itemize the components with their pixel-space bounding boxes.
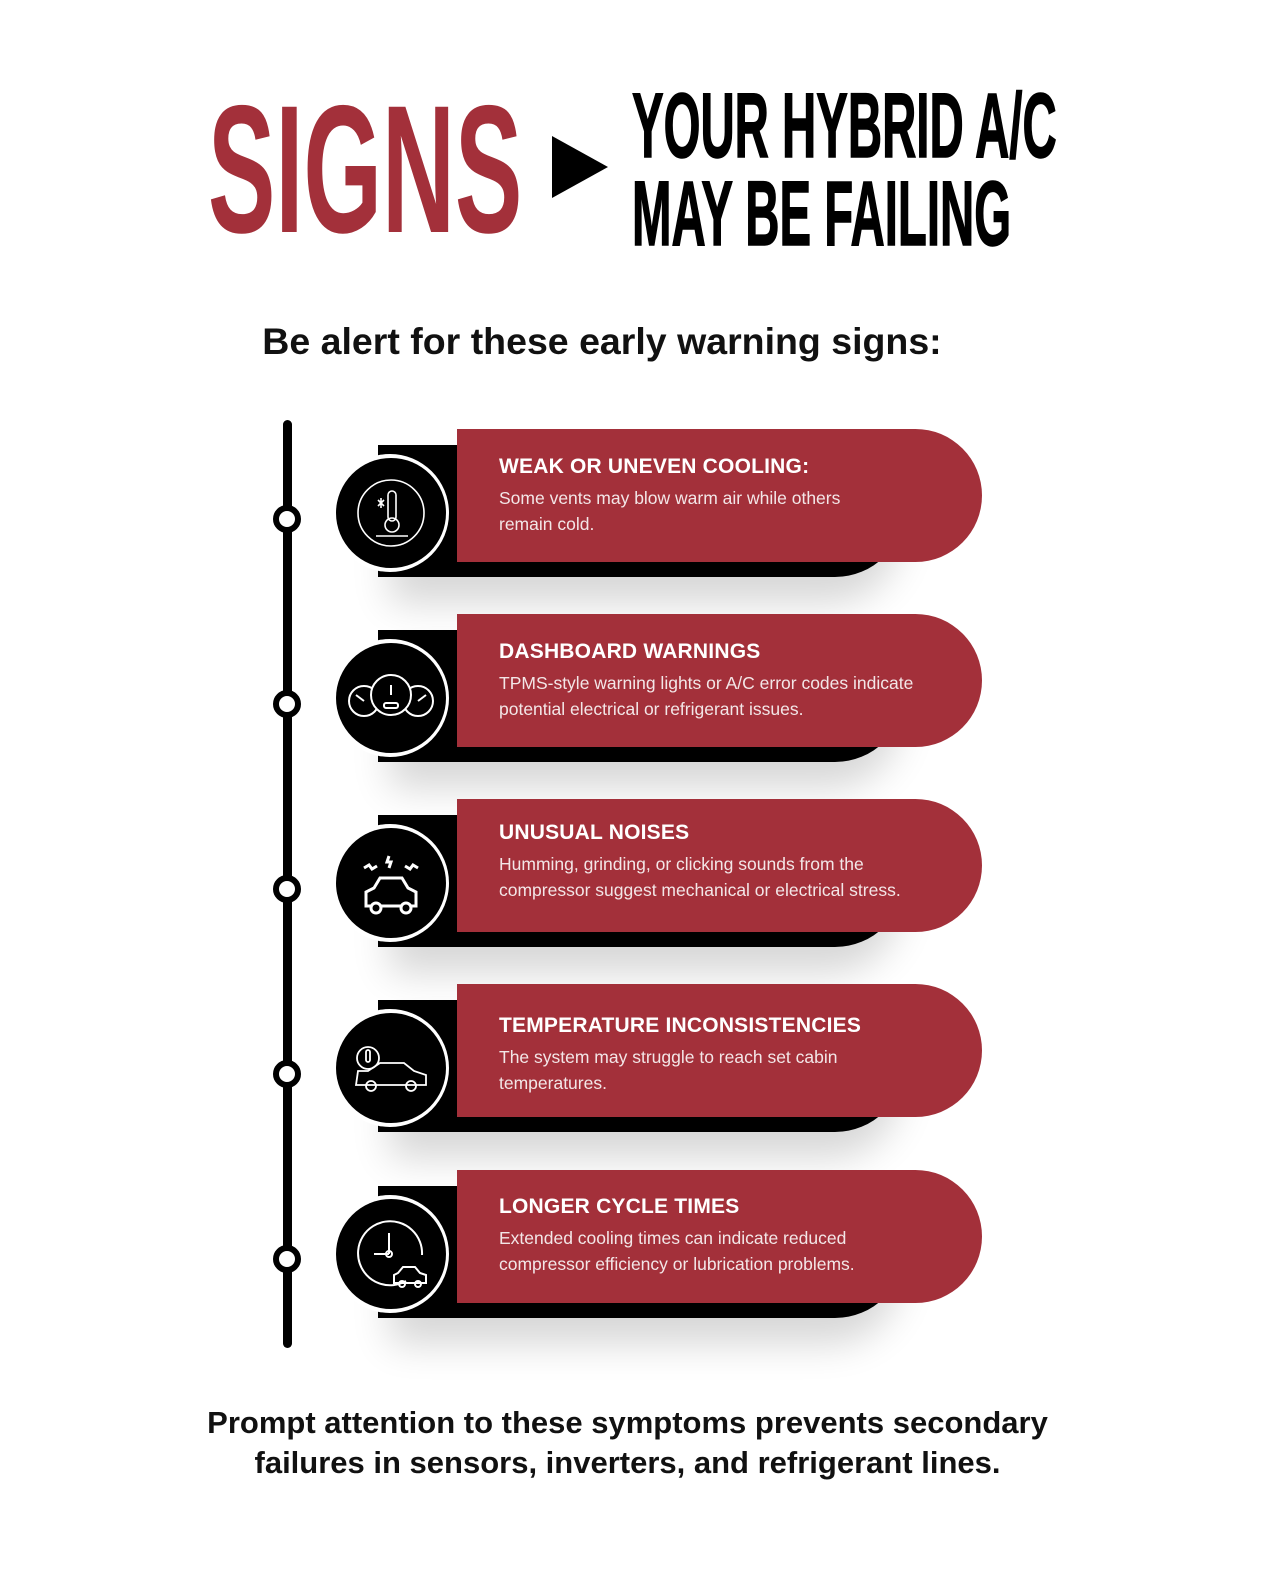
footer text [207, 1405, 1048, 1480]
heading: Be alert for these early warning signs: [262, 320, 942, 362]
icon: clock and car [357, 1220, 427, 1288]
item 2: TPMS-style warning lights or A/C error codes indicate [499, 673, 913, 693]
item 2: DASHBOARD WARNINGS [499, 640, 760, 663]
item 3: Humming, grinding, or clicking sounds from the [499, 854, 864, 874]
item 2: potential electrical or refrigerant issues. [499, 699, 803, 719]
item 5 [336, 1170, 982, 1358]
title: subtitle [632, 75, 1057, 265]
title: subtitle: MAY BE FAILING [632, 163, 1011, 265]
item 5: compressor efficiency or lubrication problems. [499, 1254, 855, 1274]
item 1 [336, 429, 982, 618]
item 4: The system may struggle to reach set cabin [499, 1047, 837, 1067]
footer text: Prompt attention to these symptoms prevents secondary [207, 1405, 1048, 1440]
item 3 [336, 799, 982, 988]
timeline dots [273, 506, 301, 1272]
item 5: Extended cooling times can indicate reduced [499, 1228, 846, 1248]
item 3: compressor suggest mechanical or electrical stress. [499, 880, 901, 900]
timeline line [283, 420, 292, 1348]
item 2 [336, 614, 982, 802]
item 5: LONGER CYCLE TIMES [499, 1195, 739, 1218]
item 1: WEAK OR UNEVEN COOLING: [499, 455, 809, 478]
title: subtitle: YOUR HYBRID A/C [632, 75, 1057, 177]
item 1: Some vents may blow warm air while others [499, 488, 840, 508]
icon: dashboard [348, 674, 434, 717]
icon: thermometer [357, 479, 425, 547]
item 4: temperatures. [499, 1073, 607, 1093]
icon: noisy car [363, 856, 419, 914]
footer text: failures in sensors, inverters, and refrigerant lines. [254, 1445, 1000, 1480]
item 4: TEMPERATURE INCONSISTENCIES [499, 1014, 861, 1037]
item 4 [336, 984, 982, 1172]
icon: car temperature [355, 1046, 427, 1092]
item 3: UNUSUAL NOISES [499, 821, 689, 844]
item 1: remain cold. [499, 514, 594, 534]
title: SIGNS: SIGNS [208, 67, 522, 271]
icon: arrow triangle [552, 136, 608, 198]
